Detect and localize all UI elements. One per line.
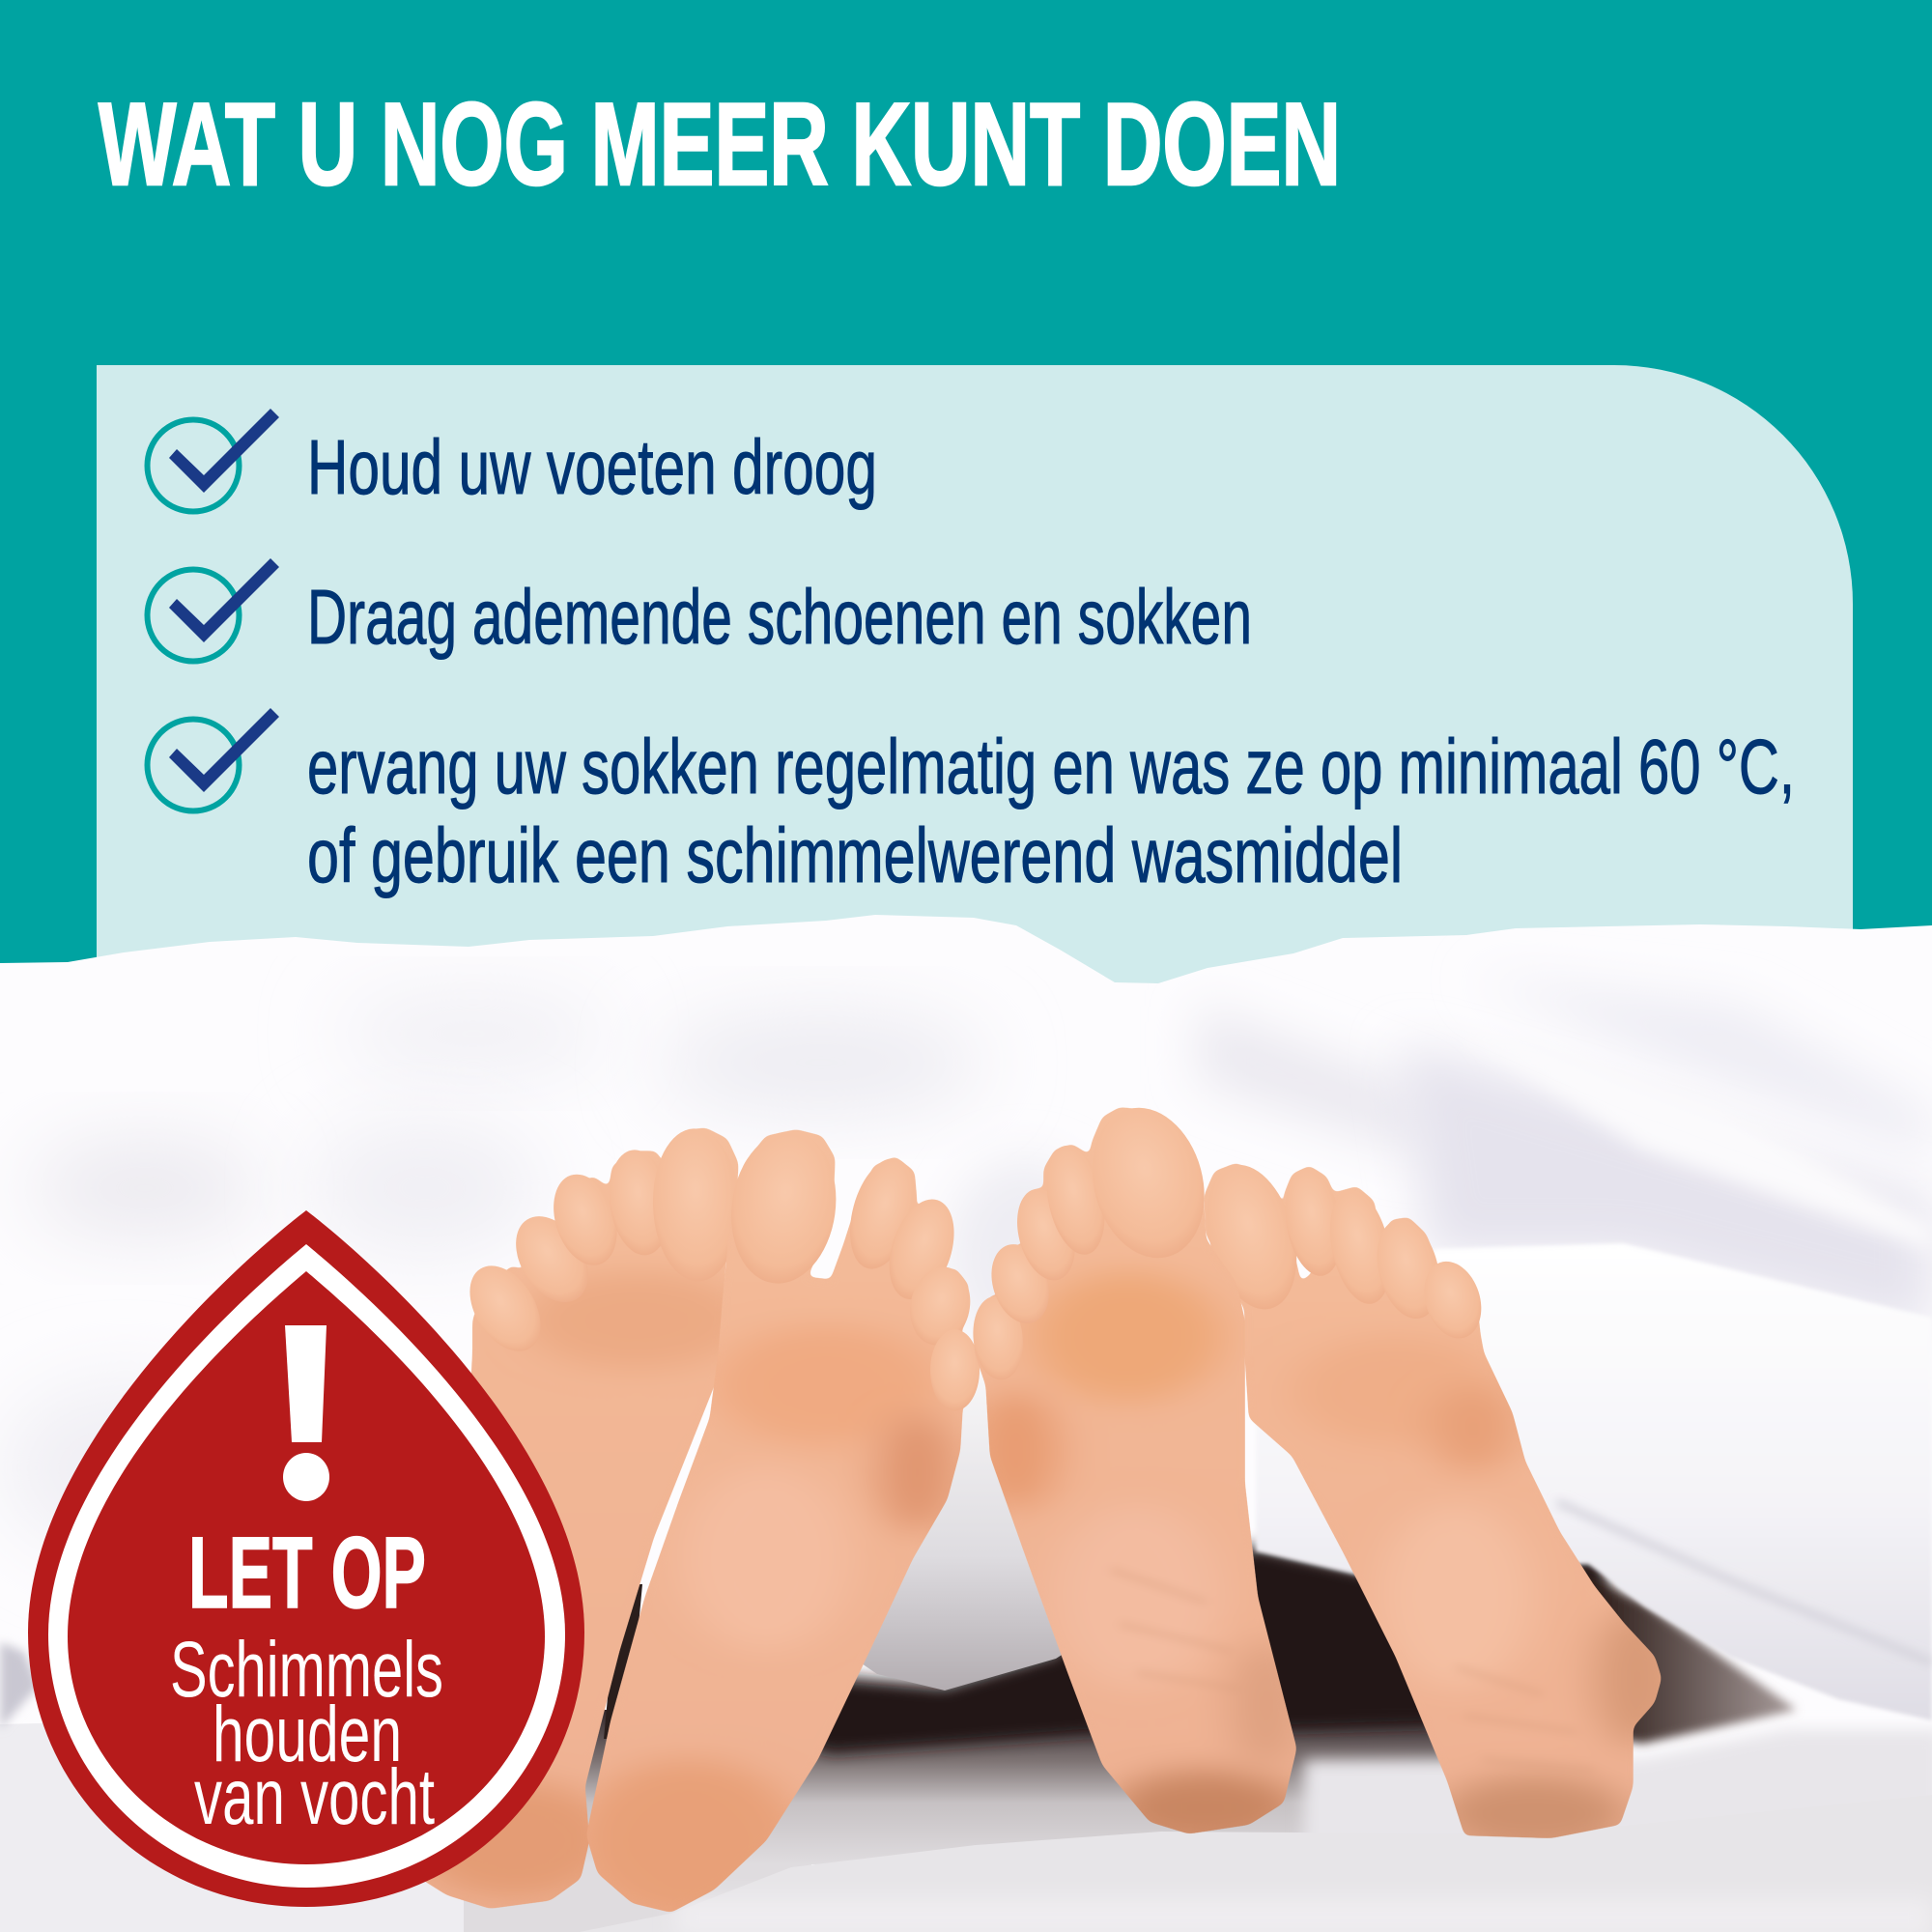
tip text 3: of gebruik een schimmelwerend wasmiddel [307, 812, 1403, 898]
warning text: Schimmels [170, 1626, 443, 1714]
tip 3 [147, 708, 1795, 898]
left duvet shadow [0, 1640, 35, 1727]
sheet behind feet lower [464, 1863, 811, 1932]
sheet behind feet [584, 1710, 1442, 1864]
photo: feet under white duvet [0, 908, 1932, 1932]
foot 2 sole [587, 1130, 969, 1913]
foot 3 toes [973, 1107, 1205, 1364]
foot 3 sole [980, 1107, 1296, 1833]
title: WAT U NOG MEER KUNT DOEN [99, 78, 1341, 210]
duvet folds [0, 976, 1932, 1555]
callout: warning drop [28, 1210, 584, 1907]
right pillow [1256, 1243, 1932, 1720]
foot 2 toes [722, 1124, 980, 1410]
icon: exclamation mark [283, 1325, 329, 1501]
tip 2 [147, 558, 1252, 661]
drop inner red [68, 1271, 545, 1864]
tip 1 [147, 409, 877, 512]
dark wedge right [1590, 1576, 1799, 1751]
feet [386, 1095, 1681, 1922]
middle pillow [864, 1390, 1062, 1690]
icon: check 3 [147, 708, 279, 811]
foot 1 sole [425, 1128, 738, 1909]
sheet right overlay [1294, 1727, 1932, 1833]
foot 1 toes [469, 1128, 728, 1339]
tip text 2: Draag ademende schoenen en sokken [307, 574, 1252, 660]
pillow seam [1557, 1502, 1932, 1662]
panel background [97, 365, 1853, 1005]
tip text 3 [307, 724, 1795, 898]
foot 4 toes [1209, 1165, 1482, 1335]
warning text: van vocht [194, 1753, 435, 1841]
foot 4 sole [1204, 1163, 1662, 1838]
dark sliver between first feet [604, 1584, 642, 1739]
icon: check 2 [147, 558, 279, 661]
dark gap beneath duvet [773, 1546, 1623, 1753]
duvet base [0, 908, 1932, 1932]
panel: tips [97, 365, 1853, 1005]
bottom sheet front [582, 1832, 1932, 1932]
warning text [170, 1626, 443, 1841]
drop outer red [28, 1210, 584, 1907]
bottom sheet left [0, 1723, 464, 1932]
warning heading: LET OP [188, 1517, 426, 1630]
sheet bottom light [676, 1898, 711, 1911]
warning text: houden [213, 1690, 402, 1778]
icon: check 1 [147, 409, 279, 512]
tip text 1: Houd uw voeten droog [307, 424, 877, 510]
drop white ring [48, 1244, 565, 1888]
